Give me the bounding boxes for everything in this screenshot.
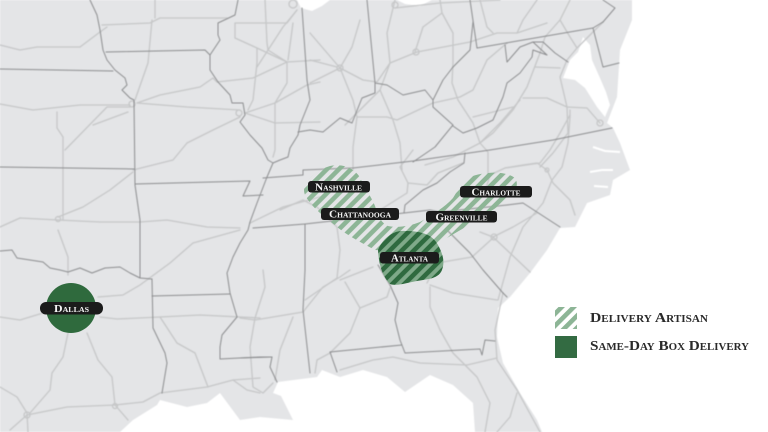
legend bbox=[555, 307, 750, 358]
label: Atlanta: Atlanta bbox=[391, 254, 428, 264]
legend swatch: Delivery Artisan bbox=[555, 307, 577, 329]
label: Greenville bbox=[426, 211, 497, 224]
legend label: Same-Day Box Delivery: Same-Day Box Delivery bbox=[590, 339, 750, 354]
label: Greenville: Greenville bbox=[436, 212, 488, 224]
label: Dallas: Dallas bbox=[54, 304, 89, 315]
region: Atlanta same-day box delivery bbox=[378, 231, 443, 285]
legend swatch: Same-Day Box Delivery bbox=[555, 336, 577, 358]
label: Atlanta bbox=[380, 252, 439, 264]
label: Dallas bbox=[40, 302, 103, 315]
label: Chattanooga: Chattanooga bbox=[329, 210, 391, 220]
region: Delivery Artisan coverage bbox=[304, 165, 517, 252]
region: Dallas same-day box delivery bbox=[46, 283, 96, 333]
label: Charlotte: Charlotte bbox=[472, 188, 521, 198]
map: interstate highways bbox=[0, 0, 603, 432]
label: Nashville bbox=[308, 181, 370, 194]
label: Charlotte bbox=[460, 186, 532, 198]
legend label: Delivery Artisan: Delivery Artisan bbox=[590, 311, 709, 326]
label: Chattanooga bbox=[321, 208, 399, 220]
map: state borders bbox=[0, 0, 619, 393]
label: Nashville: Nashville bbox=[315, 182, 362, 194]
